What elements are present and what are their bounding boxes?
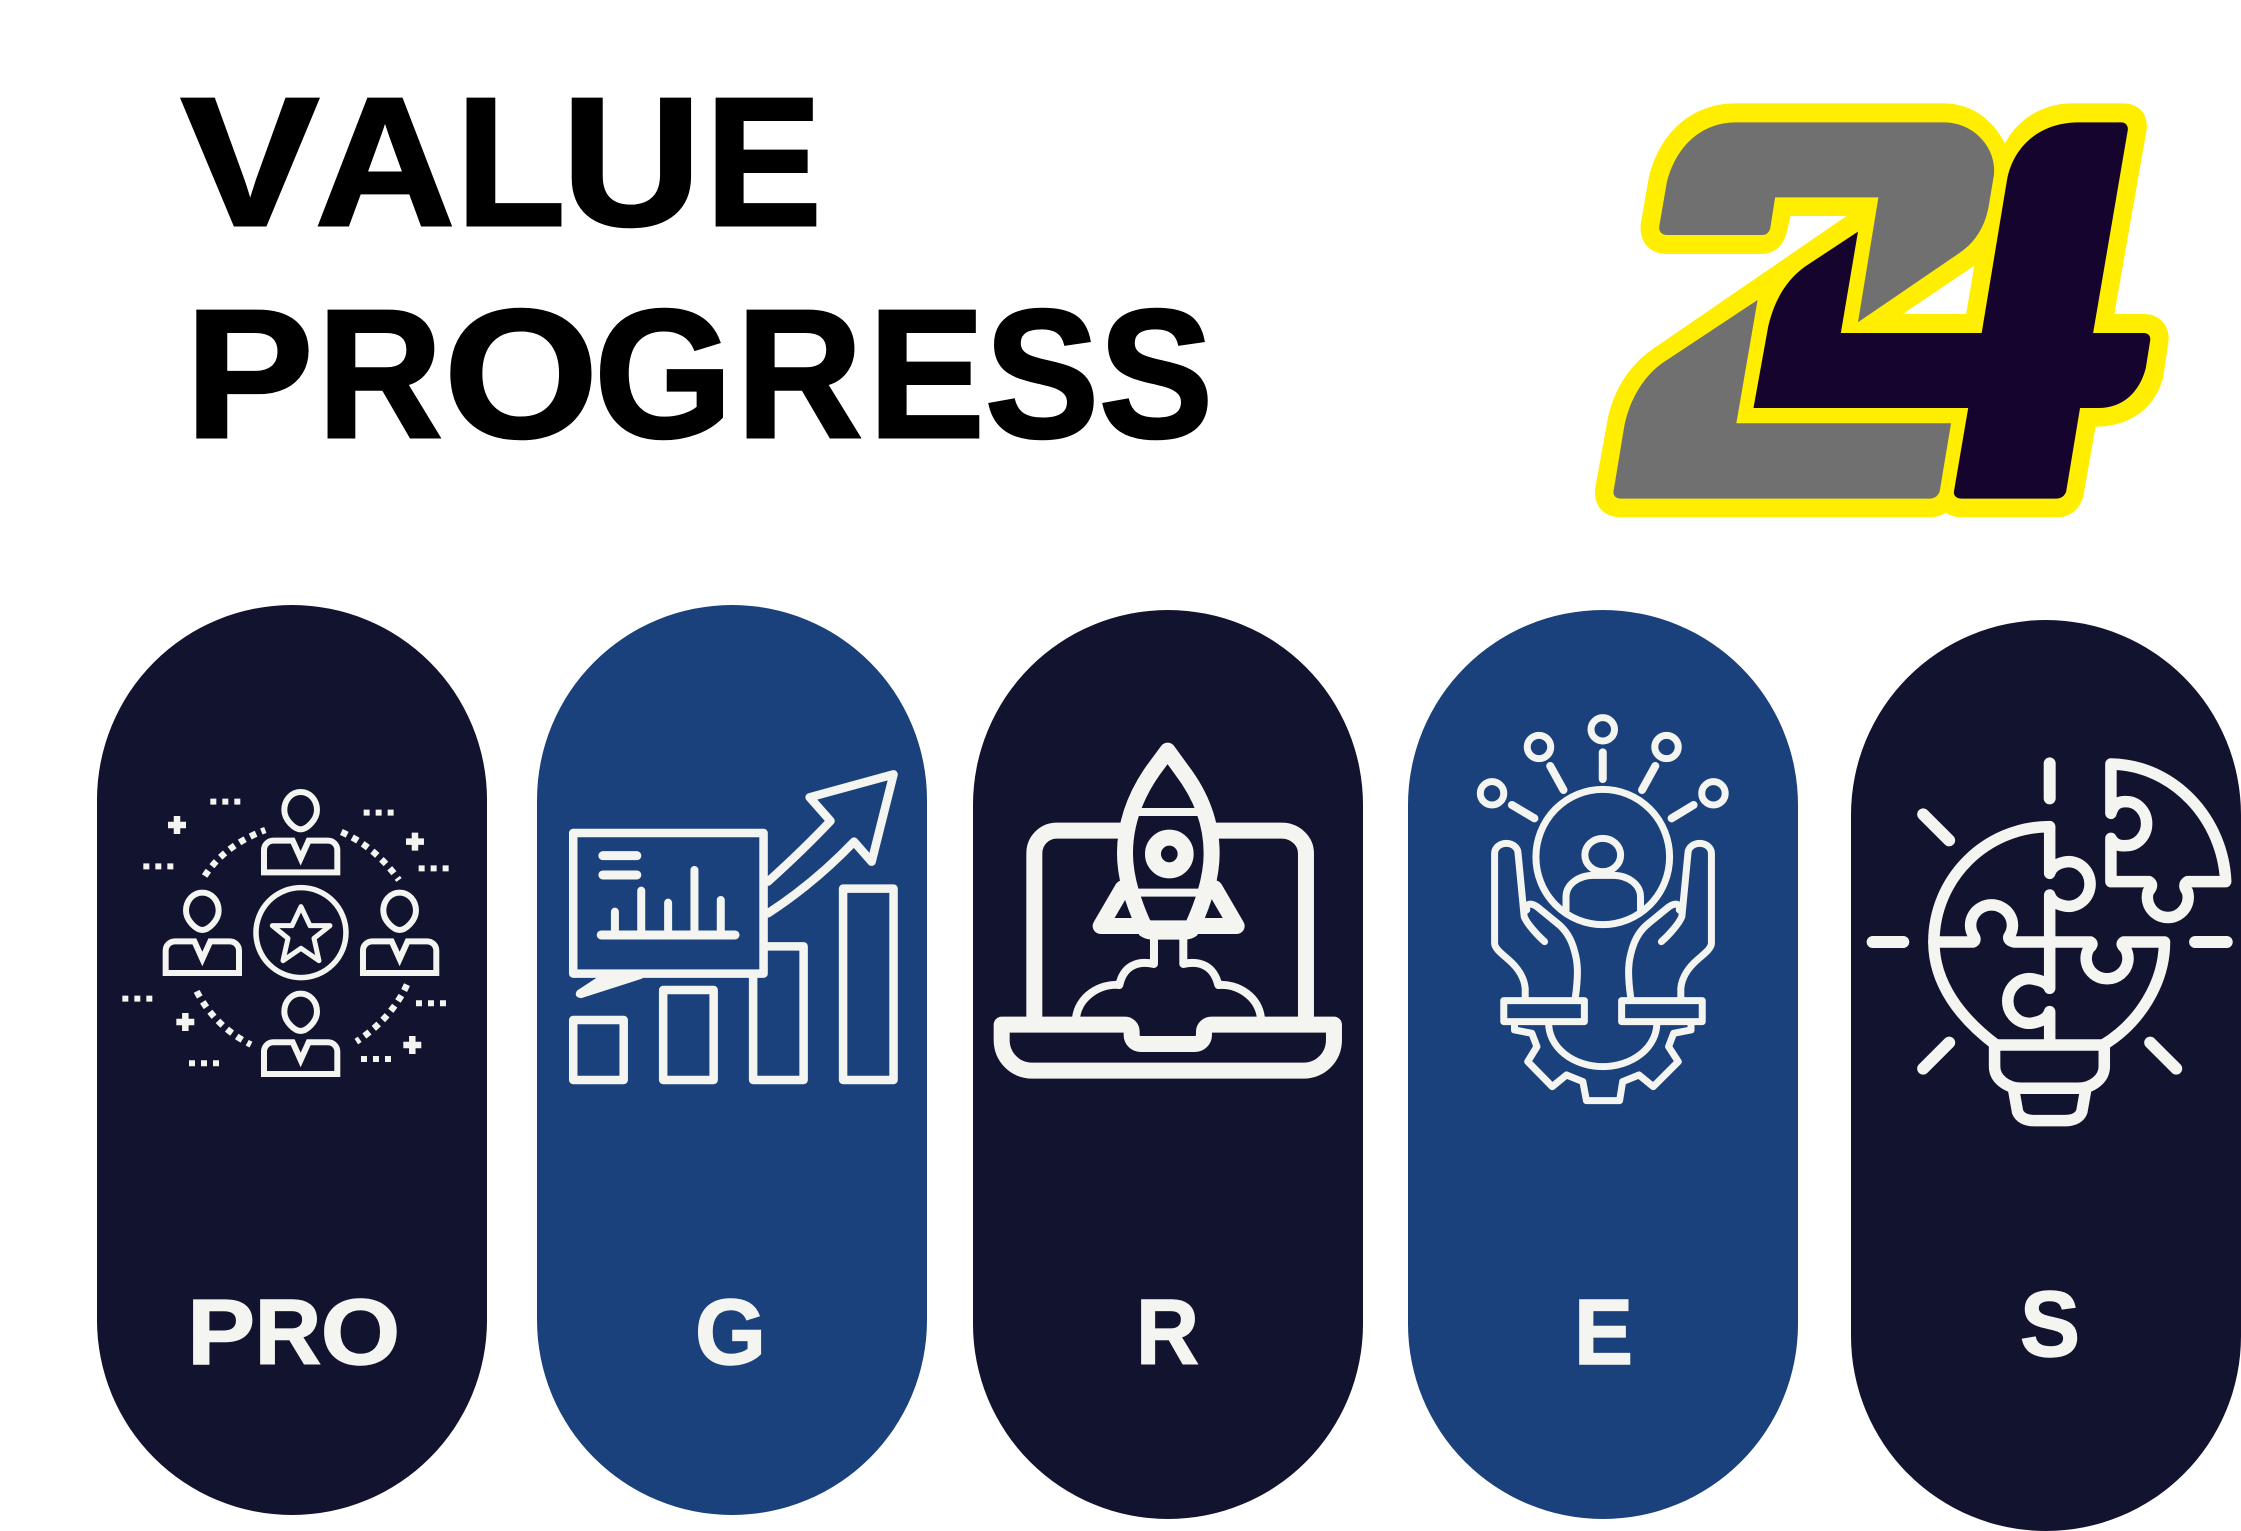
panel: R <box>973 610 1363 1519</box>
icon: rocket launching from laptop <box>1002 751 1334 1071</box>
label: S: S <box>2020 1272 2080 1376</box>
logo yellow outline <box>1595 103 2169 517</box>
title line: PROGRESS: P <box>185 271 314 476</box>
label: G: G <box>695 1280 766 1384</box>
panel: E <box>1408 610 1798 1519</box>
title <box>181 59 1213 476</box>
title line: PROGRESS: G <box>594 271 733 476</box>
title line: PROGRESS: R <box>736 271 863 476</box>
logo digit 2 <box>1613 122 1994 499</box>
pill background <box>973 610 1363 1519</box>
title line: VALUE: A <box>315 59 455 264</box>
icon: light bulb with puzzle pieces <box>1873 763 2227 1121</box>
icon: growth chart with arrow <box>573 774 894 1080</box>
pill background <box>1851 620 2241 1531</box>
label: PRO: O <box>321 1280 400 1384</box>
logo: number 24 <box>1595 103 2169 517</box>
title line: VALUE: E <box>705 59 822 264</box>
title line: PROGRESS: R <box>317 271 442 476</box>
logo white counter <box>1903 266 1974 314</box>
title line: PROGRESS: O <box>444 271 598 476</box>
title line: VALUE: L <box>456 59 566 264</box>
title line: PROGRESS: S <box>985 271 1099 476</box>
logo digit 4 <box>1753 122 2150 499</box>
pill background <box>1408 610 1798 1519</box>
label: PRO: R <box>255 1280 321 1384</box>
panel: G <box>537 605 927 1515</box>
pill background <box>537 605 927 1515</box>
title line: VALUE: V <box>181 59 319 264</box>
panel: PRO <box>97 605 487 1515</box>
label: R: R <box>1136 1280 1199 1384</box>
label: E: E <box>1574 1280 1633 1384</box>
panel: S <box>1851 620 2241 1531</box>
title line: PROGRESS: S <box>1099 271 1213 476</box>
title line: VALUE: U <box>562 59 701 264</box>
title line: PROGRESS: E <box>868 271 985 476</box>
label: PRO: P <box>187 1280 255 1384</box>
icon: hands lifting person with gear <box>1480 718 1725 1101</box>
icon: team around star <box>122 792 449 1074</box>
pill background <box>97 605 487 1515</box>
